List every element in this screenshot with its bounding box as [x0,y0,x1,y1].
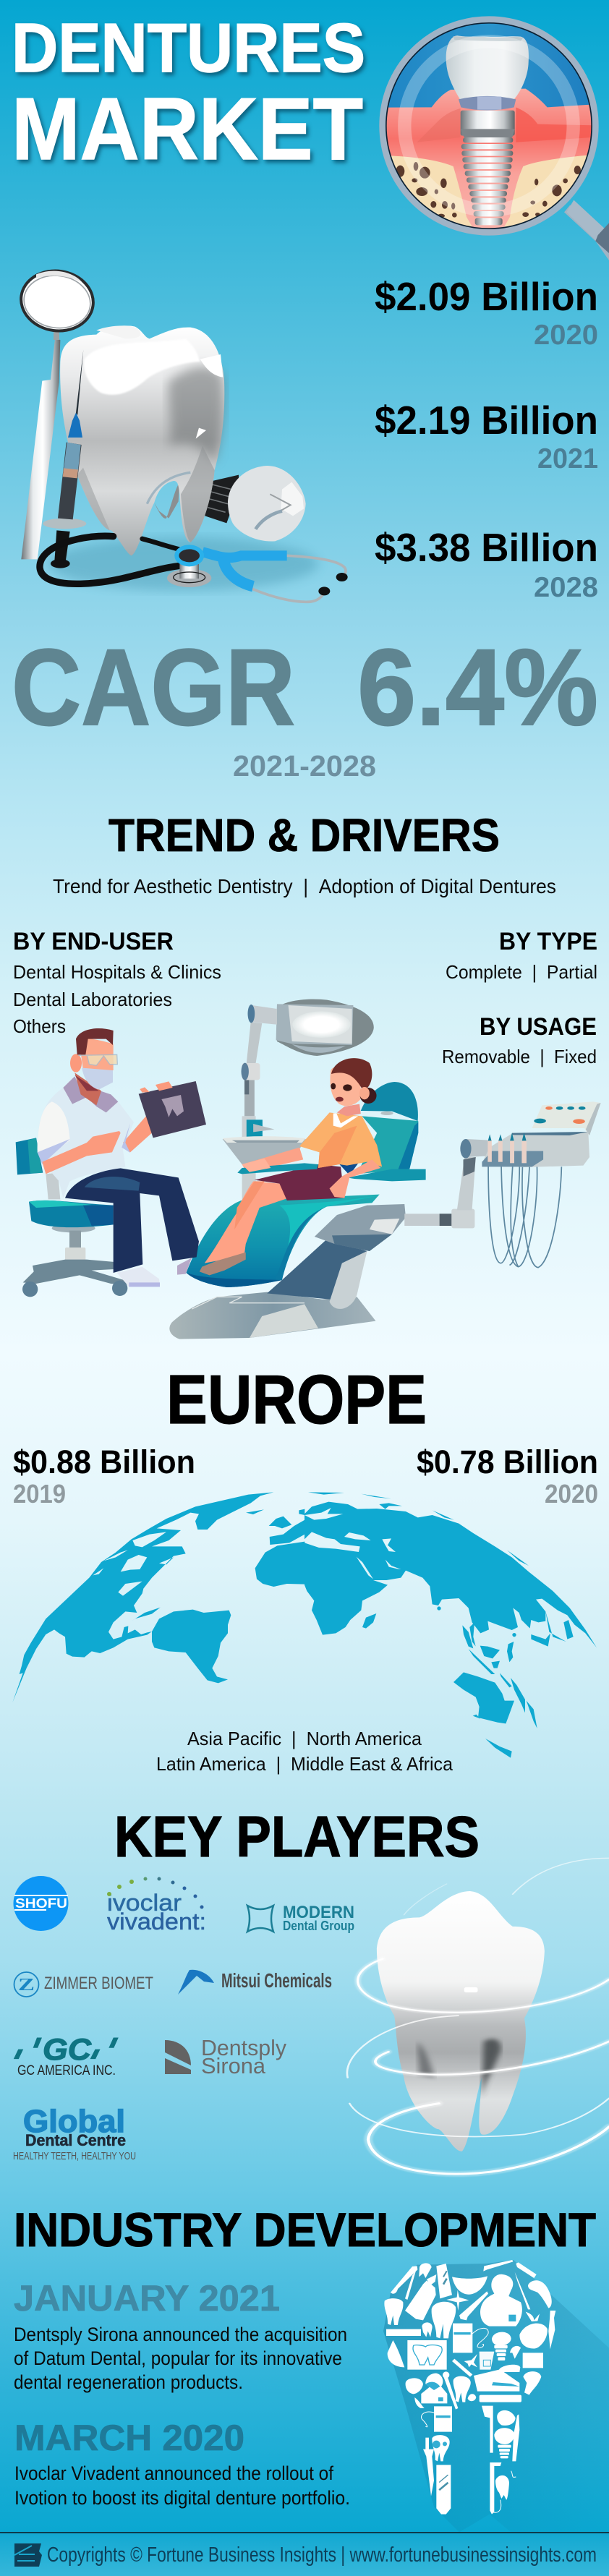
text block: by usage [442,1013,597,1067]
logo: Modern Dental Group: MODERN [283,1903,354,1922]
text block: January 2021: dental regeneration products. [14,2371,243,2393]
CAGR figure: 6.4% [357,626,598,748]
value 2028: $3.38 Billion [375,525,598,570]
text block: by end-user: BY END-USER [13,928,174,955]
logo: Shofu: SHOFU [15,1896,67,1911]
text block: by end-user [13,928,221,1037]
CAGR figure: CAGR [12,626,295,748]
map: Americas, Greenland and western Europe [12,1492,304,1702]
logo: Dentsply Sirona: Dentsply [201,2035,286,2060]
logo: GC America: GC [43,2032,92,2066]
logo: Modern Dental Group [247,1903,354,1933]
logo: Global Dental Centre: Global [23,2104,125,2139]
text block: by usage: BY USAGE [480,1013,597,1041]
text block: January 2021: of Datum Dental, popular for its innovative [14,2347,342,2369]
logo: Zimmer Biomet [14,1972,153,1997]
CAGR figure [12,626,598,782]
text block: by type [446,928,597,983]
logo: Shofu [13,1876,68,1931]
title: Dentures Market: DENTURES [12,9,365,87]
text block: by usage: Removable | Fixed [442,1046,597,1067]
text block: March 2020 [14,2418,350,2509]
value: Europe 2019 [13,1443,195,1509]
panel: market size values [375,274,598,603]
logo: Dentsply Sirona: Sirona [201,2053,266,2078]
title: Dentures Market: MARKET [12,80,363,178]
text block: March 2020: Ivoclar Vivadent announced the rollout of [14,2462,333,2484]
value: Europe 2019: 2019 [13,1479,66,1509]
illustration: tooth with white swirls [347,1858,609,2174]
heading: trend and drivers [53,809,556,897]
world map [12,1492,597,1758]
heading: trend and drivers: TREND & DRIVERS [108,809,500,861]
text block: by end-user: Others [13,1015,66,1037]
text block: by type: BY TYPE [499,928,597,955]
value: Europe 2020: $0.78 Billion [417,1443,598,1480]
logo: Ivoclar Vivadent: vivadent: [107,1908,206,1935]
logo: GC America [14,2032,119,2078]
value 2021 [375,398,598,474]
value 2028 [375,525,598,603]
text block: January 2021: Dentsply Sirona announced the acquisition [14,2324,347,2345]
heading: Europe: EUROPE [166,1361,427,1438]
heading: trend and drivers: Trend for Aesthetic Dentistry | Adoption of Digital Dentures [53,875,556,897]
illustration: dental chair, patient and instruments [169,999,601,1339]
text block: January 2021 [14,2278,347,2393]
text block: by end-user: Dental Laboratories [13,989,172,1010]
value: Europe 2020: 2020 [545,1479,598,1509]
logo: Mitsui Chemicals: Mitsui Chemicals [221,1969,332,1992]
logo: Fortune Business Insights [14,2543,42,2567]
text block: January 2021: JANUARY 2021 [14,2278,280,2319]
icon: magnifying glass over dental implant [381,20,609,260]
value 2021: 2021 [537,443,598,474]
CAGR figure: 2021-2028 [233,749,376,782]
value 2028: 2028 [534,572,598,603]
footer bar [0,2532,609,2576]
text block: other regions: Asia Pacific | North America [187,1728,422,1749]
heading: key players: KEY PLAYERS [114,1804,480,1869]
map: Eurasia, Africa and Oceania [304,1492,597,1758]
logo: Zimmer Biomet: Z [18,1976,35,1995]
logo: Ivoclar Vivadent: ivoclar [107,1890,182,1916]
text block: by end-user: Dental Hospitals & Clinics [13,961,221,983]
value: Europe 2020 [417,1443,598,1509]
logo: Mitsui Chemicals [178,1969,332,1995]
text block: other regions [156,1728,453,1775]
logo: Global Dental Centre [13,2104,136,2162]
text block: March 2020: Ivotion to boost its digital denture portfolio. [14,2487,350,2509]
logo: GC America: GC AMERICA INC. [17,2063,116,2078]
text block: March 2020: MARCH 2020 [14,2418,244,2458]
value 2020 [375,274,598,351]
logo: Zimmer Biomet: ZIMMER BIOMET [44,1974,153,1993]
illustration: tooth with dental tools [17,266,348,602]
logo: Dentsply Sirona [165,2035,286,2078]
value 2021: $2.19 Billion [375,398,598,443]
value 2020: 2020 [534,320,598,351]
logo: Global Dental Centre: Dental Centre [25,2131,126,2149]
title: Dentures Market [12,9,365,178]
value 2020: $2.09 Billion [375,274,598,319]
logo: Global Dental Centre: HEALTHY TEETH, HEALTHY YOU [13,2150,136,2162]
text block: by type: Complete | Partial [446,961,597,983]
value: Europe 2019: $0.88 Billion [13,1443,195,1480]
illustration: dentist on stool holding x-ray [16,1028,206,1297]
icon: tooth made of dental icons [383,2260,609,2533]
logo: Ivoclar Vivadent [107,1877,206,1935]
logo: Modern Dental Group: Dental Group [283,1919,354,1933]
text block: other regions: Latin America | Middle East & Africa [156,1753,453,1775]
